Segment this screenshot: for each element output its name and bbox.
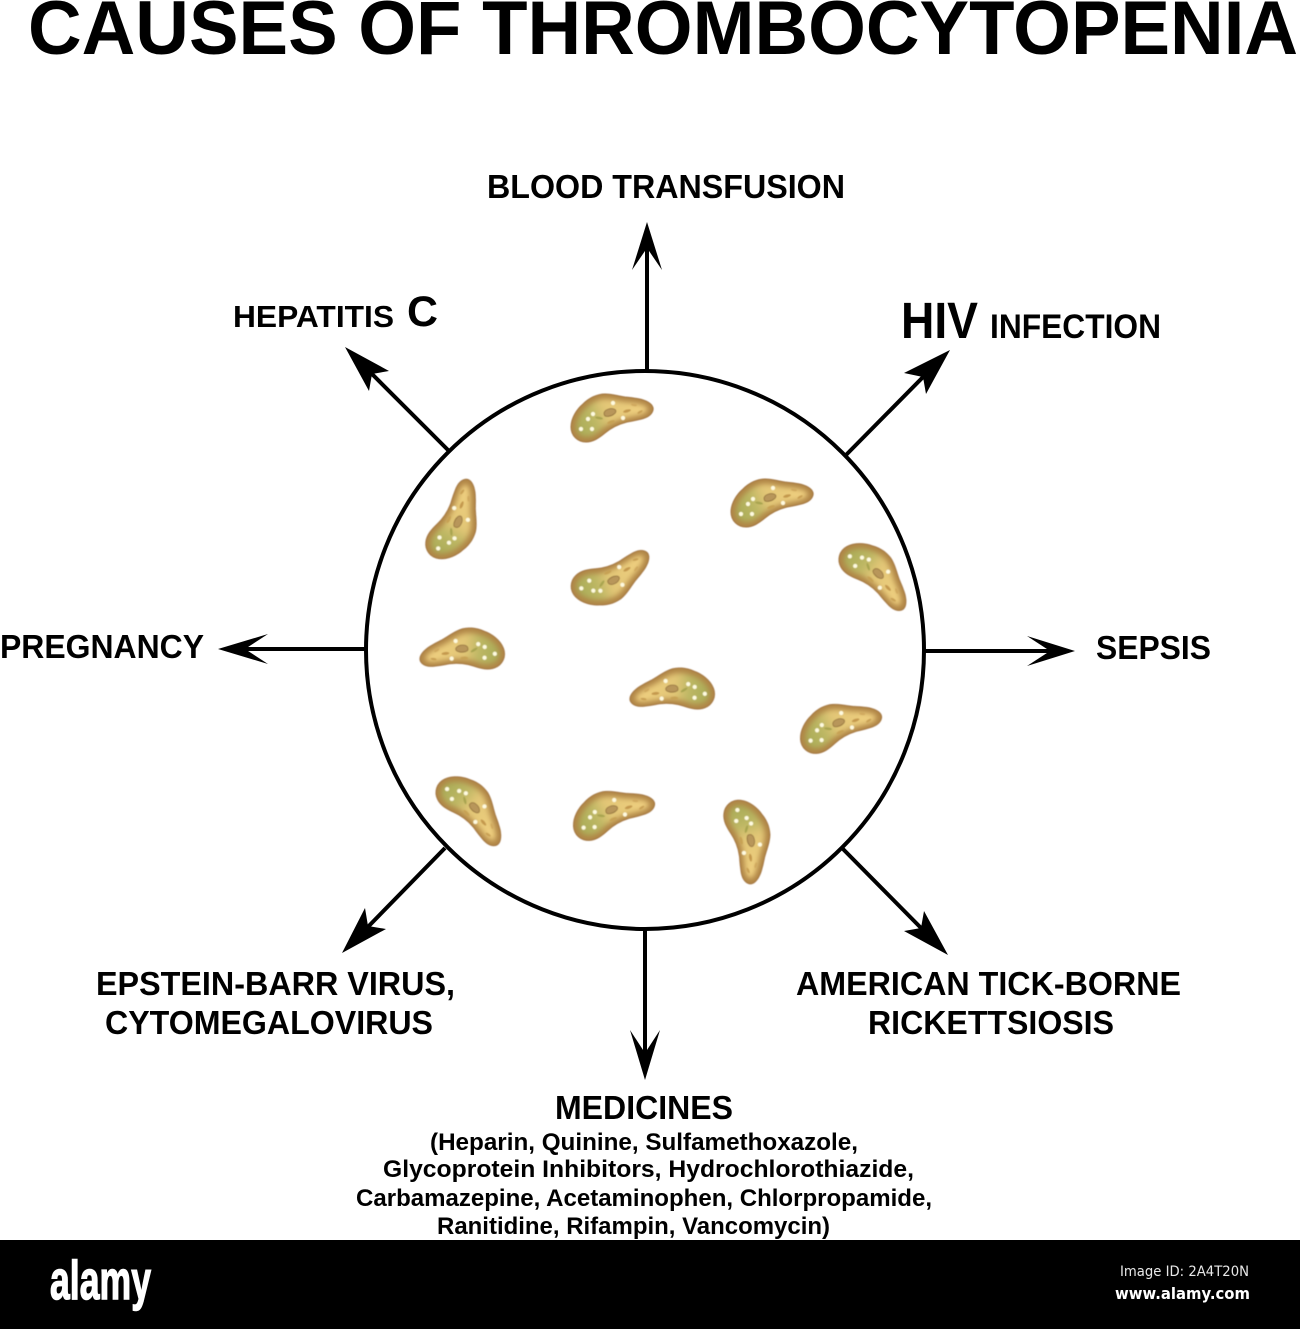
label: hepatitis C: HEPATITIS (233, 299, 394, 334)
arrow: down-left to Epstein-Barr virus (342, 848, 445, 953)
platelet 4 (424, 475, 482, 563)
label: Epstein-Barr virus, cytomegalovirus (96, 965, 455, 1041)
arrow: up to blood transfusion (632, 222, 662, 371)
arrow: up-right to HIV infection (845, 350, 950, 456)
arrow: left to pregnancy (218, 634, 365, 664)
label: HIV infection: INFECTION (990, 308, 1161, 346)
label: sepsis: SEPSIS (1096, 629, 1211, 666)
platelet 5 (834, 531, 915, 626)
label: medicines list (356, 1089, 932, 1240)
footer image id: Image ID: 2A4T20N (1120, 1264, 1249, 1280)
label: hepatitis C (233, 288, 438, 336)
label: medicines list: MEDICINES (555, 1089, 733, 1126)
platelet 1 (571, 394, 653, 442)
label: American tick-borne rickettsiosis: AMERICAN TICK-BORNE (796, 965, 1181, 1002)
label: HIV infection: HIV (901, 292, 978, 349)
arrow: down-right to American tick-borne rickettsiosis (842, 848, 948, 955)
platelet 7 (625, 658, 719, 732)
arrow: down to medicines (630, 930, 660, 1080)
label: medicines list: (Heparin, Quinine, Sulfamethoxazole, (430, 1129, 858, 1156)
label: blood transfusion: BLOOD TRANSFUSION (487, 168, 845, 205)
label: pregnancy: PREGNANCY (0, 628, 204, 665)
label: medicines list: Ranitidine, Rifampin, Vancomycin) (437, 1213, 830, 1240)
label: HIV infection (901, 292, 1161, 349)
footer logo: alamy (50, 1249, 151, 1311)
platelet 2 (731, 479, 813, 527)
label: American tick-borne rickettsiosis (796, 965, 1181, 1041)
platelet 9 (431, 765, 510, 860)
label: hepatitis C: C (407, 288, 438, 336)
label: Epstein-Barr virus, cytomegalovirus: CYTOMEGALOVIRUS (105, 1004, 433, 1041)
arrow: right to sepsis (924, 636, 1075, 666)
arrow: up-left to hepatitis C (345, 347, 449, 451)
platelet 6 (415, 618, 509, 692)
label: American tick-borne rickettsiosis: RICKETTSIOSIS (868, 1004, 1114, 1041)
label: medicines list: Glycoprotein Inhibitors, Hydrochlorothiazide, (383, 1156, 914, 1183)
platelet 3 (565, 529, 658, 620)
panel: blood sample circle with platelets (366, 371, 924, 929)
platelet 11 (717, 799, 773, 885)
footer website: www.alamy.com (1115, 1284, 1250, 1303)
platelet 10 (572, 789, 656, 841)
platelet 8 (799, 702, 883, 754)
label: medicines list: Carbamazepine, Acetaminophen, Chlorpropamide, (356, 1185, 932, 1212)
footer: stock image bar (0, 1240, 1300, 1329)
label: Epstein-Barr virus, cytomegalovirus: EPSTEIN-BARR VIRUS, (96, 965, 455, 1002)
